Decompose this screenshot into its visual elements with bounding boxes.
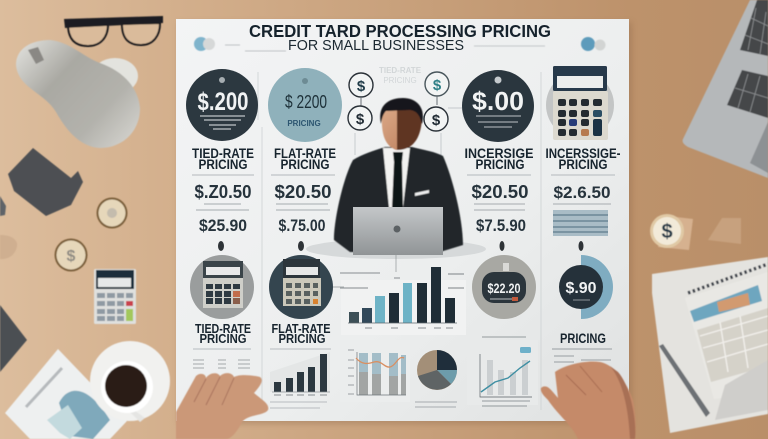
- panel: tiered pricing top: [186, 69, 258, 235]
- panel: pricing circle: $22.20: [488, 280, 521, 296]
- faint tied-rate pricing label: [379, 66, 422, 85]
- small caption: [415, 402, 457, 407]
- desk objects right: [650, 0, 768, 433]
- dollar icons left: $: [357, 78, 366, 95]
- label: flat-rate pricing: [272, 322, 330, 346]
- dollar icons left: $: [356, 111, 365, 128]
- faint tied-rate pricing label: PRICING: [383, 76, 417, 85]
- smudge on desk: [708, 218, 741, 244]
- header decorations: [194, 37, 606, 51]
- line chart: [467, 337, 538, 406]
- title: FOR SMALL BUSINESSES: [288, 38, 464, 54]
- label: incersige pricing: [464, 146, 534, 172]
- panel: tied-rate pricing bottom: [190, 241, 254, 368]
- small caption: [270, 348, 331, 350]
- icon: large calculator: [546, 66, 614, 140]
- panel: pricing gauge: $.90: [566, 280, 597, 297]
- label: tied-rate pricing: TIED-RATE: [195, 322, 251, 336]
- icon: pin: [298, 241, 304, 251]
- notebook and papers: [652, 257, 768, 433]
- price: $2.6.50: [554, 183, 610, 202]
- label: pricing: PRICING: [560, 331, 606, 346]
- icon: left hand: [176, 373, 268, 439]
- price circle 1: $.200: [198, 88, 248, 116]
- price circle 1: [186, 69, 258, 141]
- small caption: [276, 204, 330, 210]
- small caption: [467, 174, 531, 176]
- icon: pen: [659, 344, 710, 417]
- price circle 2: $ 2200: [285, 92, 327, 112]
- icon: dollar coin: $: [661, 221, 673, 243]
- small caption: [192, 174, 254, 176]
- tie: [392, 152, 403, 208]
- laptop: [353, 207, 443, 255]
- dollar icons left: [348, 73, 373, 130]
- price: $20.50: [274, 182, 332, 202]
- price circle 2: [268, 68, 342, 142]
- price: $.75.00: [278, 217, 326, 235]
- poster: [176, 19, 632, 424]
- label: incersige-pricing: INCERSSIGE-: [546, 146, 620, 161]
- striped image block: [553, 210, 608, 236]
- pocket square: [415, 190, 429, 196]
- pie chart: [417, 350, 457, 390]
- connector lines: [355, 108, 462, 170]
- small caption: [193, 348, 251, 350]
- panel: pricing circle: [448, 241, 536, 319]
- icon: dark wallet: [8, 148, 83, 216]
- small caption: [474, 204, 525, 210]
- document under coin: [658, 216, 693, 250]
- title: CREDIT TARD PROCESSING PRICING: [249, 21, 551, 41]
- label: incersige pricing: PRICING: [476, 157, 524, 172]
- label: flat-rate pricing: FLAT-RATE: [274, 146, 336, 161]
- label: tied-rate pricing: PRICING: [200, 332, 246, 346]
- small caption: [270, 402, 327, 408]
- column dividers: [258, 72, 541, 412]
- panel: pricing gauge: [552, 241, 613, 362]
- desk objects left: [0, 16, 170, 439]
- icon: desk lamp: [16, 40, 140, 148]
- panel: center charts: [333, 255, 538, 407]
- label: incersige pricing: INCERSIGE: [464, 146, 534, 161]
- price: $25.90: [199, 217, 247, 235]
- bar chart: flat-rate: [270, 352, 330, 395]
- panel: calculator and incersige-pricing top right: [546, 66, 620, 236]
- small caption: [271, 174, 335, 176]
- head: [382, 108, 421, 150]
- price circle 2: PRICING: [287, 119, 321, 128]
- icon: laptop: [683, 0, 768, 178]
- main bar chart: [333, 255, 466, 335]
- label: flat-rate pricing: PRICING: [278, 332, 326, 346]
- faint tied-rate pricing label: TIED-RATE: [379, 66, 422, 75]
- icon: coin upper: [96, 198, 128, 228]
- dollar icons right: [424, 72, 449, 131]
- panel: incentive pricing top: [462, 70, 534, 235]
- combo chart: [340, 340, 410, 402]
- label: tied-rate pricing: [195, 322, 251, 346]
- icon: dollar coin: [650, 214, 684, 248]
- dark object left edge: [0, 305, 27, 372]
- panel: flat-rate pricing bottom: [269, 241, 333, 408]
- dollar icons right: $: [433, 77, 442, 94]
- label: flat-rate pricing: PRICING: [280, 157, 330, 172]
- icon: glasses: [64, 16, 163, 46]
- label: flat-rate pricing: [274, 146, 336, 172]
- shirt: [383, 148, 410, 208]
- price circle 3: [462, 70, 534, 142]
- calculator circle: [269, 255, 333, 319]
- icon: coffee cup: [90, 341, 170, 422]
- panel: flat-rate pricing top: [268, 68, 342, 235]
- label: incersige-pricing: PRICING: [558, 157, 608, 172]
- price circle 3: $.00: [472, 86, 524, 116]
- title: [249, 21, 551, 54]
- icon: small calculator: [94, 269, 136, 324]
- small desk object left edge: [0, 235, 17, 259]
- icon: pin: [218, 241, 224, 251]
- document on desk: [5, 349, 127, 439]
- calculator circle: [190, 255, 254, 319]
- small icons row: [193, 360, 250, 368]
- shadow under laptop: [306, 239, 486, 259]
- small caption: [196, 204, 249, 210]
- icon: coin lower: $: [67, 248, 76, 265]
- label: incersige-pricing: [546, 146, 620, 172]
- label: tied-rate pricing: TIED-RATE: [192, 146, 254, 161]
- hair: [380, 98, 423, 124]
- price: $20.50: [472, 182, 528, 202]
- price: $.Z0.50: [194, 182, 252, 202]
- suit: [334, 147, 463, 252]
- businessman: [334, 98, 463, 252]
- price: $7.5.90: [476, 217, 526, 235]
- label: flat-rate pricing: FLAT-RATE: [272, 322, 330, 336]
- label: tied-rate pricing: [192, 146, 254, 172]
- dollar icons right: $: [432, 112, 441, 129]
- icon: right hand: [541, 362, 636, 439]
- label: tied-rate pricing: PRICING: [198, 157, 248, 172]
- small caption: [553, 203, 611, 205]
- small caption: [551, 174, 615, 176]
- small object left edge: [0, 196, 6, 216]
- icon: coin lower: [54, 238, 88, 272]
